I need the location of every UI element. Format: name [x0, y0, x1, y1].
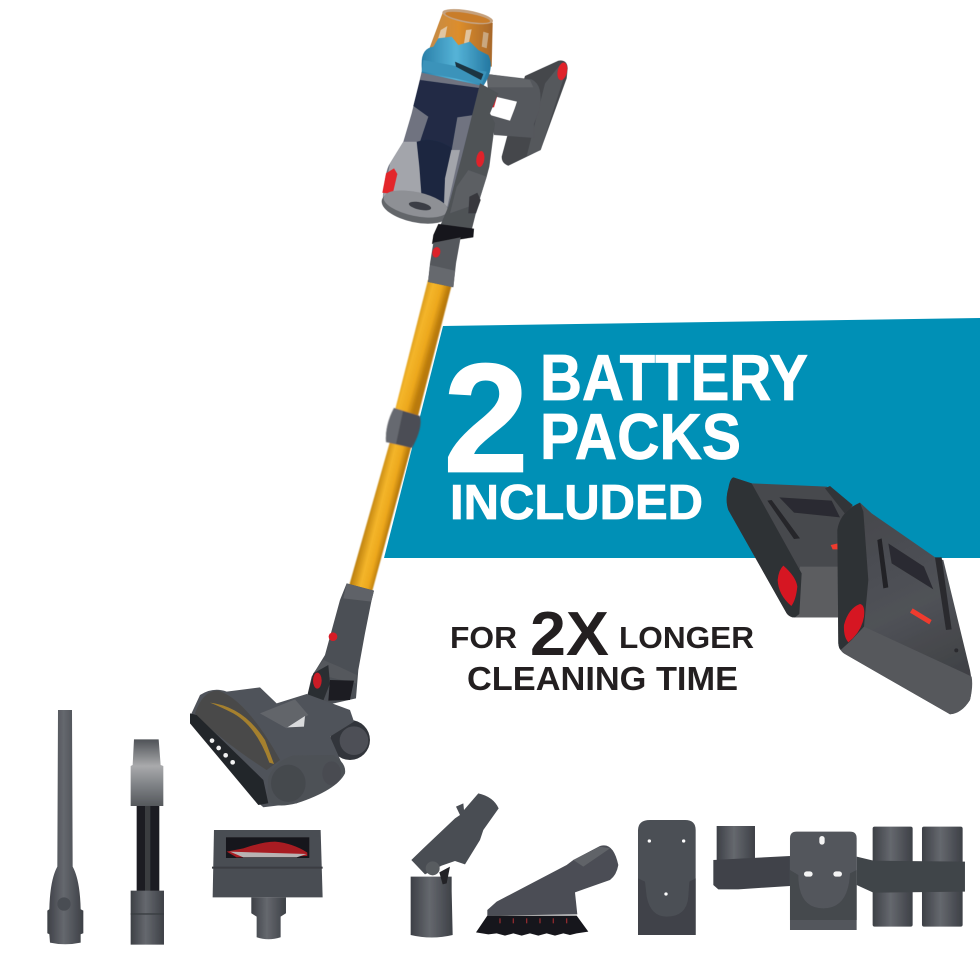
accessory: mini motorised brush: [212, 830, 323, 939]
head body: [190, 687, 354, 807]
battery packs: [727, 477, 972, 714]
front battery pack: [837, 503, 972, 714]
LED strip: [190, 713, 268, 805]
rear battery pack: [727, 477, 853, 617]
dust bin base: [379, 185, 453, 229]
caption: for 2X longer cleaning time: FOR: [450, 620, 517, 655]
vacuum floor head: [190, 583, 374, 807]
dock bands: [713, 856, 790, 889]
transparent brush window: [195, 691, 280, 770]
black brush collar: [432, 224, 474, 244]
caption: for 2X longer cleaning time: 2X: [530, 600, 609, 669]
accessory: small wall mount: [638, 820, 696, 935]
banner headline: 2 battery packs included: 2: [443, 332, 529, 506]
dock back plate: [790, 832, 857, 930]
orange cyclone cup: [425, 13, 493, 67]
vacuum motor head: [379, 6, 569, 287]
banner headline: 2 battery packs included: BATTERY: [540, 341, 808, 414]
bristles: [476, 916, 588, 936]
caption: for 2X longer cleaning time: [450, 600, 754, 697]
accessory: crevice tool: [47, 710, 83, 944]
handle spine: [438, 83, 498, 230]
accessory: angled adapter: [411, 793, 499, 937]
accessory: large wall dock: [713, 826, 965, 930]
banner headline: 2 battery packs included: [443, 332, 808, 530]
right wheel: [330, 720, 370, 760]
accessory: flexible hose: [131, 739, 164, 945]
neck and swivel: [307, 583, 374, 705]
transparent dust bin: [383, 72, 483, 213]
front end cap: [267, 755, 345, 806]
handle: [487, 74, 541, 138]
teal banner: [384, 318, 980, 558]
accessory: dusting brush: [476, 845, 618, 936]
battery mount plate: [502, 60, 568, 166]
dock cylinders: [717, 826, 755, 863]
caption: for 2X longer cleaning time: CLEANING TIME: [467, 660, 738, 697]
neck connector: [428, 237, 461, 287]
vacuum shaft: [349, 280, 452, 592]
blue cyclone ring: [421, 37, 491, 86]
caption: for 2X longer cleaning time: LONGER: [619, 620, 754, 655]
banner headline: 2 battery packs included: INCLUDED: [450, 476, 703, 530]
banner headline: 2 battery packs included: PACKS: [540, 400, 741, 473]
